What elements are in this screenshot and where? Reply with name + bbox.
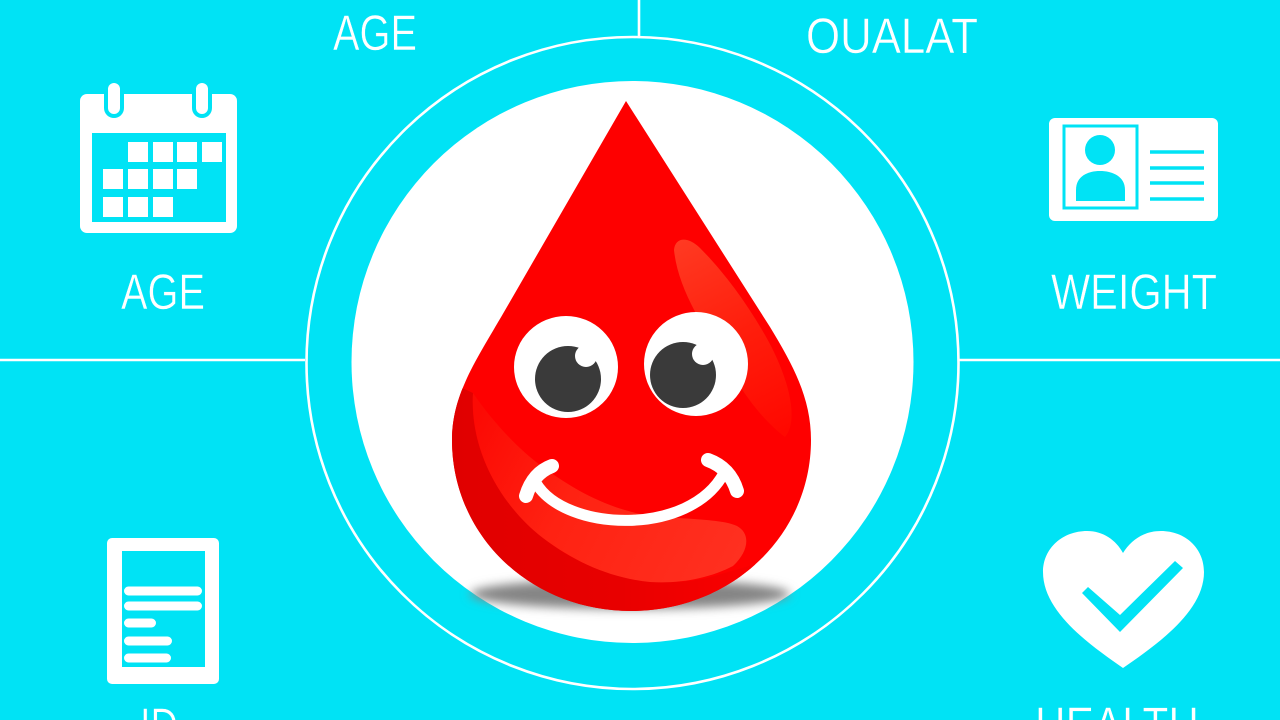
drop upper highlight xyxy=(674,240,792,437)
drop lower crescent highlight xyxy=(473,393,746,582)
right eye xyxy=(644,312,748,416)
drop shadow xyxy=(470,579,790,609)
central ring xyxy=(306,37,958,689)
left eye xyxy=(514,316,618,418)
label: weight: WEIGHT xyxy=(1051,264,1217,320)
icon: heart with check xyxy=(1043,531,1204,668)
icon: document xyxy=(107,538,219,684)
icon: calendar xyxy=(80,79,237,233)
blood drop character xyxy=(440,101,820,630)
heading: age: AGE xyxy=(333,5,417,61)
white central disc xyxy=(352,81,914,643)
heading: oualat: OUALAT xyxy=(806,8,978,64)
label: age: AGE xyxy=(121,264,205,320)
icon: id card xyxy=(1049,118,1218,221)
smile xyxy=(526,460,737,520)
drop lower rim shading xyxy=(452,388,756,611)
